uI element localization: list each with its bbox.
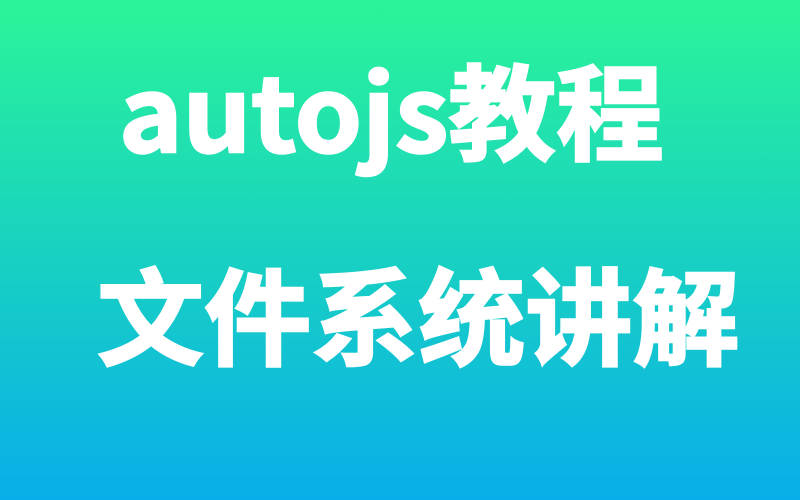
title line 1: autojs教程 bbox=[119, 31, 664, 182]
title line 2: 文件系统讲解 bbox=[97, 236, 740, 388]
